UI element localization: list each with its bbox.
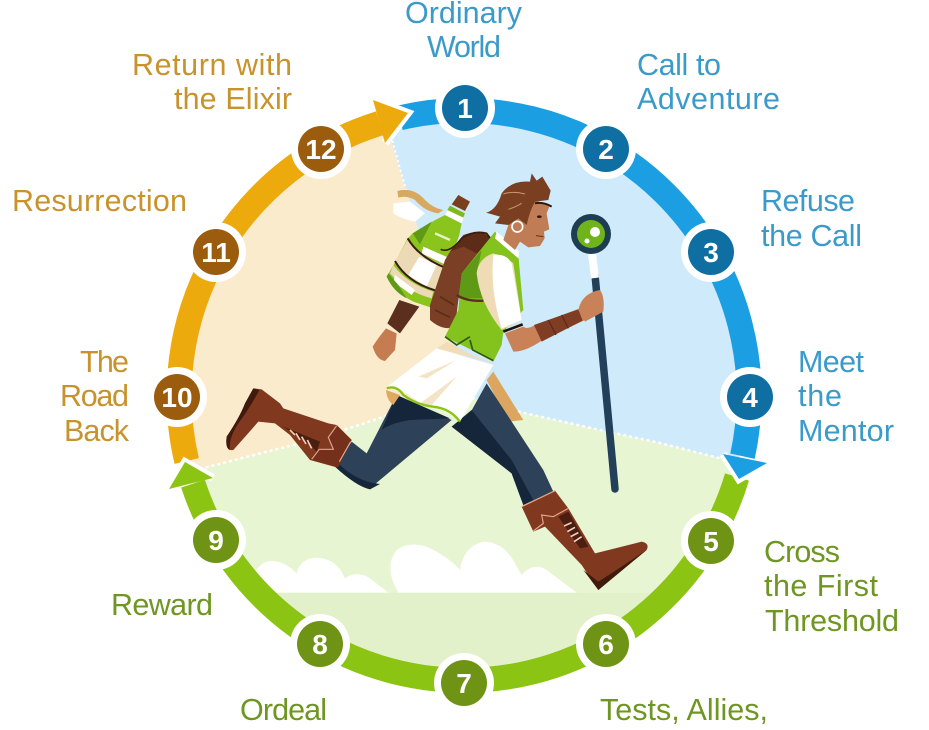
label: Refuse the Call: the Call [761, 219, 862, 253]
label: The Road Back: Road [60, 379, 129, 413]
node 11 [186, 222, 246, 282]
label: Call to Adventure: Adventure [637, 82, 780, 116]
cream region [190, 136, 458, 468]
tunic skirt [386, 342, 495, 422]
back leg [335, 395, 452, 488]
node 10: 10 [161, 382, 193, 413]
shirt sleeve [477, 253, 522, 330]
label: Cross the First Threshold: Threshold [765, 604, 899, 638]
node 9 [186, 510, 246, 570]
label: Ordeal: Ordeal [240, 693, 327, 727]
label: Cross the First Threshold: Cross [764, 535, 840, 569]
staff [571, 214, 615, 489]
label: Reward: Reward [111, 588, 213, 622]
label: Ordinary World [405, 0, 523, 64]
label: Return with the Elixir [132, 48, 292, 116]
arrow: blue [723, 454, 767, 479]
back arm [373, 300, 419, 361]
backpack [430, 233, 495, 328]
front leg [452, 383, 553, 505]
arrow: green [169, 462, 213, 489]
node 2: 2 [598, 134, 614, 165]
label: Refuse the Call [761, 184, 862, 253]
node 2 [576, 119, 636, 179]
node 1 [435, 78, 495, 138]
arc: orange stage [179, 123, 380, 461]
node 3 [681, 222, 741, 282]
label: Return with the Elixir: Return with [132, 48, 292, 82]
node 12 [291, 119, 351, 179]
grass region [196, 398, 732, 593]
bottle with ribbon [387, 190, 470, 308]
horizon dotted line [202, 397, 722, 468]
node 7 [434, 653, 494, 713]
node 8 [290, 614, 350, 674]
label: Refuse the Call: Refuse [761, 184, 855, 218]
label: Meet the Mentor: Mentor [798, 414, 894, 448]
legs [335, 383, 553, 505]
torso: backpack, vest, shirt and arm [430, 232, 604, 362]
node 9: 9 [208, 525, 224, 556]
arrow: orange [373, 100, 408, 143]
ring arcs [179, 110, 749, 680]
cream jagged edge [390, 126, 406, 190]
node 11: 11 [201, 237, 231, 268]
label: Cross the First Threshold [764, 535, 899, 638]
panel: background scene [190, 124, 740, 666]
label: Call to Adventure [637, 48, 780, 116]
cape tail [487, 372, 523, 422]
label: Tests, Allies,: Tests, Allies, [600, 693, 768, 727]
arc: blue stage [400, 110, 749, 456]
label: The Road Back [60, 345, 130, 448]
node 7: 7 [456, 668, 472, 699]
front boot [522, 491, 648, 590]
node 10 [147, 367, 207, 427]
node 3: 3 [703, 237, 719, 268]
lower grass band [170, 593, 770, 703]
node 5: 5 [703, 526, 719, 557]
label: The Road Back: The [80, 345, 129, 379]
node 6 [576, 614, 636, 674]
node 4: 4 [742, 382, 758, 413]
arm and hand [505, 308, 585, 352]
stage nodes [147, 78, 780, 713]
head [486, 173, 552, 250]
node 5 [681, 511, 741, 571]
back boot [226, 388, 352, 467]
hero character [226, 173, 648, 590]
label: Ordinary World: World [427, 30, 501, 64]
label: Return with the Elixir: the Elixir [174, 82, 292, 116]
label: Meet the Mentor: the [798, 379, 842, 413]
arrowheads [169, 100, 767, 489]
label: The Road Back: Back [64, 414, 130, 448]
node 4 [720, 367, 780, 427]
node 1: 1 [457, 93, 473, 124]
node 6: 6 [598, 629, 614, 660]
vest [445, 232, 523, 362]
clouds [247, 542, 577, 593]
label: Cross the First Threshold: the First [764, 569, 879, 603]
label: Meet the Mentor: Meet [798, 345, 865, 379]
arc: green stage [193, 477, 737, 680]
label: Call to Adventure: Call to [637, 48, 721, 82]
label: Resurrection: Resurrection [12, 184, 187, 218]
node 8: 8 [312, 629, 328, 660]
label: Meet the Mentor [798, 345, 894, 448]
node 12: 12 [305, 134, 337, 165]
